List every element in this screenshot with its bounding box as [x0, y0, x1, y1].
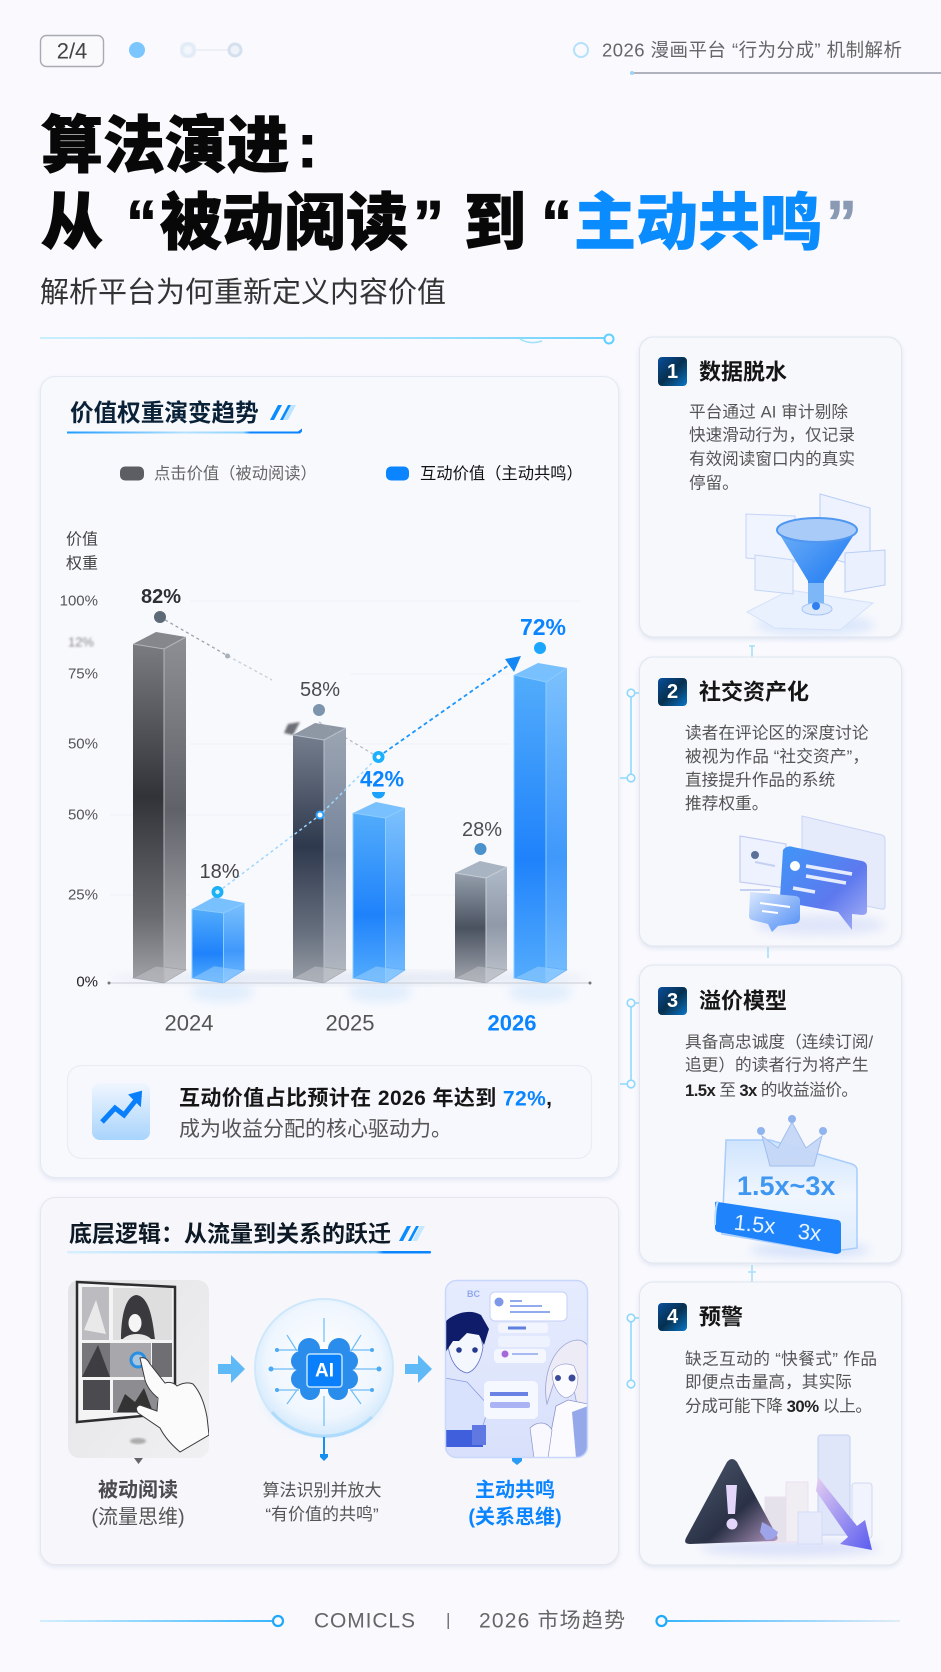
- bar: 2024 click 82%: [133, 632, 186, 983]
- step labels: 算法识别并放大: [262, 1481, 382, 1500]
- y axis: 25%: [68, 886, 98, 904]
- year labels: [165, 1010, 536, 1036]
- body text: 缺乏互动的 “快餐式” 作品: [685, 1350, 877, 1368]
- badge: [658, 1303, 687, 1331]
- bar: 2024 interactive 18%: [192, 897, 244, 983]
- title: 算法演进: [41, 112, 289, 181]
- step labels: (关系思维): [468, 1506, 562, 1528]
- body text: 平台通过 AI 审计剔除: [689, 402, 848, 422]
- bar: 2026 interactive 72%: [514, 663, 567, 983]
- data labels: 42%: [360, 766, 404, 792]
- callout: [68, 1066, 592, 1158]
- connectors: [620, 645, 768, 1388]
- callout: 互动价值占比预计在 2026 年达到 72%,: [179, 1087, 552, 1110]
- icon: crown block: [715, 1115, 870, 1258]
- card 3: premium model: [640, 965, 902, 1263]
- image: active resonance manga: BC: [467, 1289, 480, 1299]
- card 2: social asset: [640, 657, 902, 946]
- body text: [689, 402, 855, 492]
- heading: [67, 399, 302, 434]
- icon: crown block: 3x: [797, 1219, 822, 1246]
- card 4: warning: 预警: [699, 1304, 743, 1330]
- marker: [512, 1458, 522, 1465]
- badge: 4: [667, 1306, 679, 1328]
- legend: [120, 465, 583, 483]
- image: passive reading tablet: [68, 1280, 209, 1458]
- header tag: [574, 40, 941, 75]
- badge: [658, 357, 687, 386]
- body text: 有效阅读窗口内的真实: [689, 450, 855, 468]
- step labels: (流量思维): [91, 1506, 185, 1528]
- body text: 被视为作品 “社交资产”，: [685, 747, 869, 766]
- body text: 分成可能下降 30% 以上。: [685, 1396, 872, 1416]
- body text: 直接提升作品的系统: [685, 770, 835, 790]
- badge: 3: [667, 990, 678, 1012]
- panel: value weight trend: [40, 376, 618, 1178]
- y axis: 50%: [68, 736, 98, 752]
- icon: trending arrow: [92, 1083, 150, 1140]
- bar: 2025 click 58%: [284, 722, 346, 983]
- step labels: 主动共鸣: [475, 1478, 555, 1502]
- trend line: interactive value with arrow: [218, 656, 521, 892]
- step labels: “有价值的共鸣”: [265, 1505, 379, 1524]
- year labels: 2025: [326, 1010, 374, 1036]
- step labels: 被动阅读: [98, 1478, 178, 1502]
- subtitle: 解析平台为何重新定义内容价值: [40, 276, 446, 309]
- legend: 点击价值（被动阅读）: [154, 465, 317, 483]
- card 3: premium model: 溢价模型: [699, 988, 787, 1014]
- body text: 即便点击量高，其实际: [685, 1372, 852, 1392]
- bar: 2026 click 28%: [455, 861, 507, 983]
- title: 从: [41, 189, 103, 258]
- title: [41, 112, 857, 258]
- title: :: [297, 112, 318, 181]
- icon: AI brain sphere: [255, 1299, 393, 1461]
- y axis: 50%: [68, 806, 98, 824]
- y axis: [60, 531, 98, 990]
- title: ”: [826, 189, 857, 258]
- data labels: 72%: [520, 614, 566, 640]
- page indicator: 2/4: [57, 38, 87, 64]
- marker: [134, 1458, 143, 1464]
- image: active resonance manga: [445, 1280, 588, 1458]
- page indicator: [40, 36, 241, 66]
- title: ”: [413, 189, 444, 258]
- icon: crown block: 1.5x: [733, 1210, 777, 1239]
- card 1: data dehydration: [640, 337, 902, 637]
- card 1: data dehydration: 数据脱水: [699, 360, 787, 384]
- title: 被动阅读: [160, 189, 408, 258]
- body text: [685, 724, 869, 813]
- footer: 2026 市场趋势: [479, 1610, 625, 1632]
- title: “: [541, 189, 572, 258]
- header tag: 2026 漫画平台 “行为分成” 机制解析: [602, 40, 902, 60]
- body text: 1.5x 至 3x 的收益溢价。: [685, 1080, 858, 1100]
- year labels: 2024: [165, 1010, 213, 1036]
- badge: [658, 678, 687, 706]
- trend line: click value: [160, 617, 378, 757]
- icon: chat bubbles: [740, 816, 885, 935]
- data labels: 82%: [141, 586, 181, 608]
- title: “: [126, 189, 157, 258]
- footer: [40, 1610, 900, 1632]
- icon: AI brain sphere: AI: [315, 1360, 334, 1382]
- title: 到: [464, 189, 526, 258]
- icon: crown block: 1.5x~3x: [737, 1171, 835, 1201]
- y axis: 0%: [76, 974, 98, 990]
- body text: 停留。: [689, 474, 739, 492]
- icon: warning chart: [685, 1435, 880, 1556]
- body text: 追更）的读者行为将产生: [685, 1056, 869, 1074]
- arrow: [405, 1355, 432, 1383]
- arrow: [218, 1355, 245, 1383]
- body text: [685, 1350, 877, 1416]
- badge: [658, 987, 687, 1015]
- legend: 互动价值（主动共鸣）: [420, 465, 583, 483]
- card 2: social asset: 社交资产化: [699, 680, 809, 704]
- footer: COMICLS: [314, 1610, 415, 1632]
- step labels: [91, 1478, 562, 1528]
- base shadow and axis: [108, 973, 592, 1002]
- body text: 读者在评论区的深度讨论: [685, 724, 869, 742]
- badge: 1: [667, 361, 678, 383]
- y axis: 价值: [66, 531, 98, 549]
- year labels: 2026: [488, 1010, 536, 1036]
- icon: funnel: [746, 494, 885, 635]
- panel: underlying logic: [40, 1198, 618, 1564]
- badge: 2: [667, 681, 678, 703]
- divider: [40, 334, 614, 344]
- data labels: 18%: [199, 861, 240, 883]
- y axis: 权重: [66, 555, 98, 573]
- heading: 价值权重演变趋势: [70, 399, 259, 427]
- callout: 成为收益分配的核心驱动力。: [179, 1118, 452, 1141]
- bar chart: [133, 632, 567, 983]
- bar: 2025 interactive 42%: [353, 802, 405, 983]
- data labels: 28%: [462, 819, 502, 841]
- heading: 底层逻辑：从流量到关系的跃迁: [69, 1221, 391, 1247]
- body text: 快速滑动行为，仅记录: [689, 426, 855, 444]
- body text: 推荐权重。: [685, 794, 768, 813]
- y axis: 12%: [68, 634, 94, 650]
- data labels: [141, 586, 566, 898]
- body text: 具备高忠诚度（连续订阅/: [685, 1032, 874, 1052]
- y axis: 100%: [60, 592, 98, 610]
- card 4: warning: [640, 1282, 902, 1565]
- data labels: 58%: [300, 679, 340, 701]
- y axis: 75%: [68, 666, 98, 682]
- body text: [685, 1032, 874, 1100]
- title: 主动共鸣: [574, 189, 822, 258]
